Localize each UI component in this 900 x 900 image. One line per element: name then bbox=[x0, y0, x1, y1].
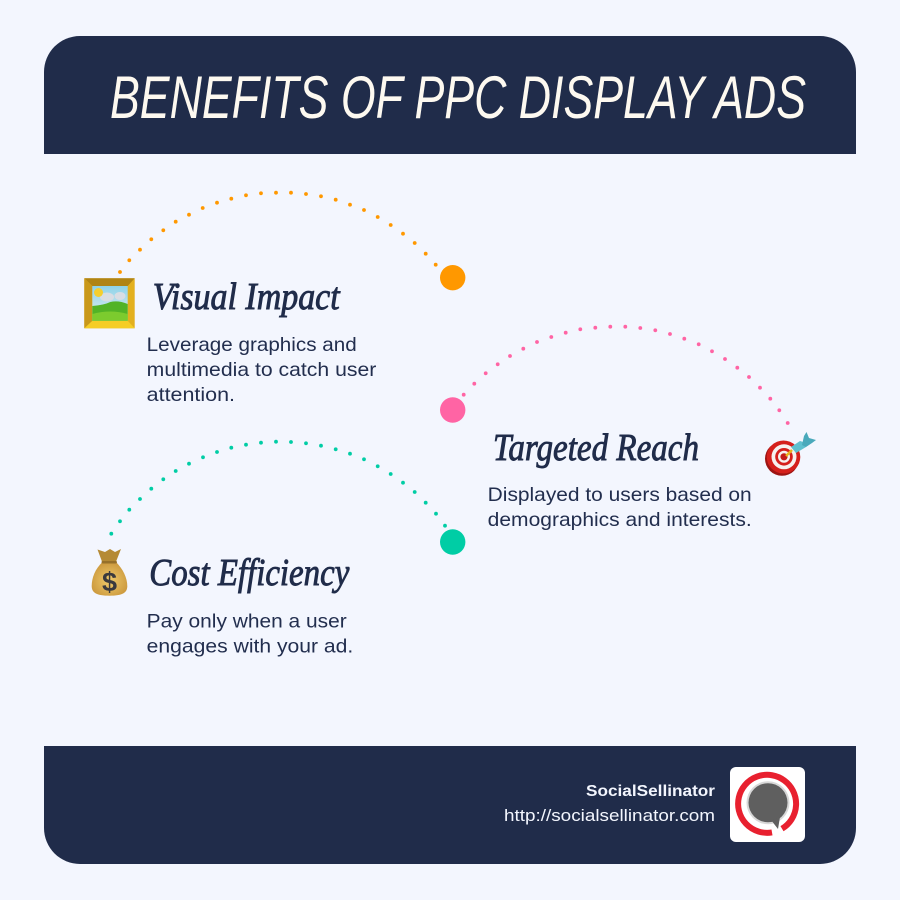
benefit text: Cost Efficiency: Pay only when a user bbox=[147, 611, 347, 633]
icon: dart and target bbox=[765, 432, 816, 476]
benefit text: Targeted Reach: demographics and interests. bbox=[488, 509, 752, 531]
benefit text: Cost Efficiency bbox=[147, 611, 353, 658]
pink dotted arc with node bbox=[440, 327, 788, 423]
benefit heading: Targeted Reach: Targeted Reach bbox=[493, 427, 699, 469]
benefit text: Targeted Reach bbox=[488, 484, 752, 531]
benefit text: Targeted Reach: Displayed to users based on bbox=[488, 484, 752, 506]
footer banner bbox=[44, 746, 856, 864]
benefit text: Visual Impact: multimedia to catch user bbox=[147, 359, 377, 381]
green dotted arc with node bbox=[111, 442, 465, 555]
website url: http://socialsellinator.com bbox=[504, 807, 715, 825]
logo bbox=[730, 767, 805, 842]
benefit text: Cost Efficiency: engages with your ad. bbox=[147, 636, 353, 658]
brand name: SocialSellinator bbox=[586, 783, 715, 800]
benefit text: Visual Impact: attention. bbox=[147, 384, 235, 406]
icon: money bag bbox=[92, 549, 127, 597]
header banner bbox=[44, 36, 856, 154]
benefit heading: Visual Impact: Visual Impact bbox=[153, 276, 341, 318]
benefit text: Visual Impact: Leverage graphics and bbox=[147, 334, 357, 356]
icon: money bag: $ bbox=[102, 567, 117, 597]
benefit heading: Cost Efficiency: Cost Efficiency bbox=[149, 552, 349, 594]
orange dotted arc with node bbox=[120, 193, 465, 290]
benefit text: Visual Impact bbox=[147, 334, 377, 406]
icon: framed picture bbox=[84, 278, 135, 328]
